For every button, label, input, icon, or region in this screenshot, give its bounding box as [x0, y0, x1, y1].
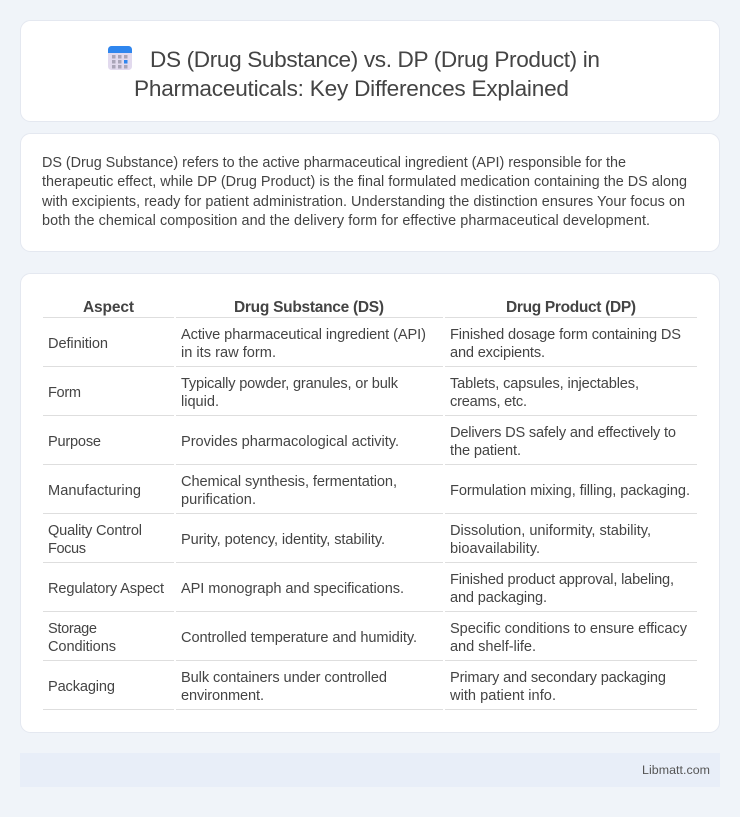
- title: [134, 47, 600, 101]
- row: Quality Control Focus: Purity, potency, identity, stability.: [181, 532, 385, 548]
- row: Packaging: Primary and secondary packaging: [450, 670, 666, 686]
- row: Packaging: with patient info.: [449, 688, 556, 704]
- row: Regulatory Aspect: API monograph and specifications.: [181, 581, 404, 597]
- row: Quality Control Focus: bioavailability.: [450, 541, 540, 557]
- title: DS (Drug Substance) vs. DP (Drug Product) in: [150, 47, 600, 72]
- row: Storage Conditions: Controlled temperature and humidity.: [181, 630, 417, 646]
- row: Storage Conditions: [48, 621, 688, 655]
- panel: title card: [20, 20, 720, 122]
- row: Regulatory Aspect: and packaging.: [450, 590, 547, 606]
- footer bar: [20, 753, 720, 787]
- row: Manufacturing: purification.: [181, 492, 256, 508]
- row: Form: Form: [48, 385, 81, 401]
- row: Regulatory Aspect: Finished product approval, labeling,: [450, 572, 674, 588]
- row: Storage Conditions: Conditions: [48, 639, 116, 655]
- row: Purpose: Provides pharmacological activity.: [181, 434, 399, 450]
- footer text: Libmatt.com: [642, 763, 710, 777]
- row: Manufacturing: Formulation mixing, filling, packaging.: [450, 483, 690, 499]
- row: Packaging: Packaging: [48, 679, 115, 695]
- row: Quality Control Focus: Focus: [48, 541, 86, 557]
- intro text block: therapeutic effect, while DP (Drug Product) is the final formulated medication containing the DS along: [42, 174, 687, 190]
- row: Definition: Finished dosage form containing DS: [450, 327, 681, 343]
- table header: [83, 299, 636, 316]
- row: Definition: and excipients.: [450, 345, 545, 361]
- intro text block: DS (Drug Substance) refers to the active pharmaceutical ingredient (API) responsible for the: [42, 155, 626, 171]
- intro text block: [41, 155, 687, 229]
- row: Storage Conditions: Storage: [48, 621, 97, 637]
- row: Form: Typically powder, granules, or bulk: [181, 376, 399, 392]
- table header: Drug Substance (DS): [234, 299, 384, 316]
- row: Regulatory Aspect: [48, 572, 674, 606]
- row: Purpose: [48, 425, 676, 459]
- panel: comparison table: [20, 274, 720, 732]
- row: Storage Conditions: and shelf-life.: [450, 639, 536, 655]
- row: Quality Control Focus: Quality Control: [48, 523, 142, 539]
- row: Purpose: the patient.: [450, 443, 521, 459]
- row: Form: liquid.: [181, 394, 219, 410]
- row: Definition: [48, 327, 681, 361]
- row: Packaging: Bulk containers under controlled: [181, 670, 387, 686]
- row: Purpose: Purpose: [48, 434, 101, 450]
- row: Definition: Active pharmaceutical ingredient (API): [181, 327, 426, 343]
- row: Form: Tablets, capsules, injectables,: [450, 376, 639, 392]
- intro text block: with excipients, ready for patient administration. Understanding the distinction ensures Your focus on: [41, 194, 685, 210]
- row: Regulatory Aspect: Regulatory Aspect: [48, 581, 164, 597]
- row: Manufacturing: Manufacturing: [48, 483, 141, 499]
- row: Form: creams, etc.: [450, 394, 527, 410]
- row: Packaging: [48, 670, 666, 704]
- icon: calendar: [108, 46, 132, 70]
- row: Quality Control Focus: [48, 523, 651, 557]
- intro text block: both the chemical composition and the delivery form for effective pharmaceutical development.: [42, 213, 650, 229]
- row: Definition: Definition: [48, 336, 108, 352]
- row: Definition: in its raw form.: [181, 345, 276, 361]
- row: Manufacturing: Chemical synthesis, fermentation,: [181, 474, 397, 490]
- table header: Aspect: [83, 299, 134, 316]
- row: Purpose: Delivers DS safely and effectively to: [450, 425, 676, 441]
- row: Manufacturing: [48, 474, 690, 508]
- row: Quality Control Focus: Dissolution, uniformity, stability,: [450, 523, 651, 539]
- row: Packaging: environment.: [181, 688, 264, 704]
- panel: introduction: [20, 134, 720, 252]
- row: Form: [48, 376, 639, 410]
- title: Pharmaceuticals: Key Differences Explained: [134, 76, 569, 101]
- row: Storage Conditions: Specific conditions to ensure efficacy: [450, 621, 688, 637]
- table header: Drug Product (DP): [506, 299, 636, 316]
